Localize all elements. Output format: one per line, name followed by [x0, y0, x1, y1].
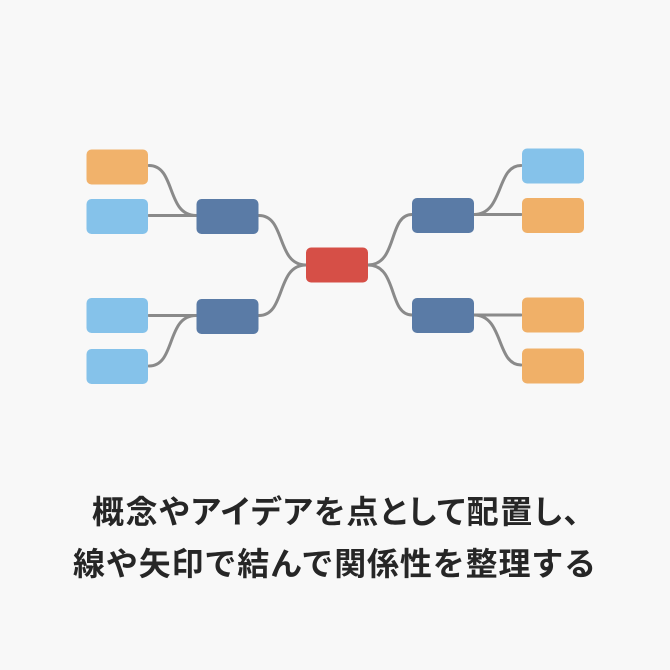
left leaf: blue middle [86, 298, 148, 333]
caption line 1: 概念やアイデアを点として配置し、 [92, 494, 581, 530]
connectors: right branches [368, 166, 521, 365]
right branch node upper [412, 198, 474, 233]
left branch node upper [196, 199, 258, 234]
left leaf: orange [86, 150, 148, 184]
central node [306, 248, 368, 282]
right leaf: orange lower [522, 348, 584, 384]
right leaf: orange upper [522, 198, 584, 233]
left leaf: blue lower [86, 349, 148, 384]
caption line 2: 線や矢印で結んで関係性を整理する [73, 546, 597, 582]
right leaf: orange middle [522, 298, 584, 332]
right leaf: blue [522, 148, 584, 184]
left leaf: blue upper [86, 199, 148, 234]
right branch node lower [412, 298, 474, 333]
connectors: left branches [149, 166, 306, 366]
left branch node lower [196, 299, 258, 334]
